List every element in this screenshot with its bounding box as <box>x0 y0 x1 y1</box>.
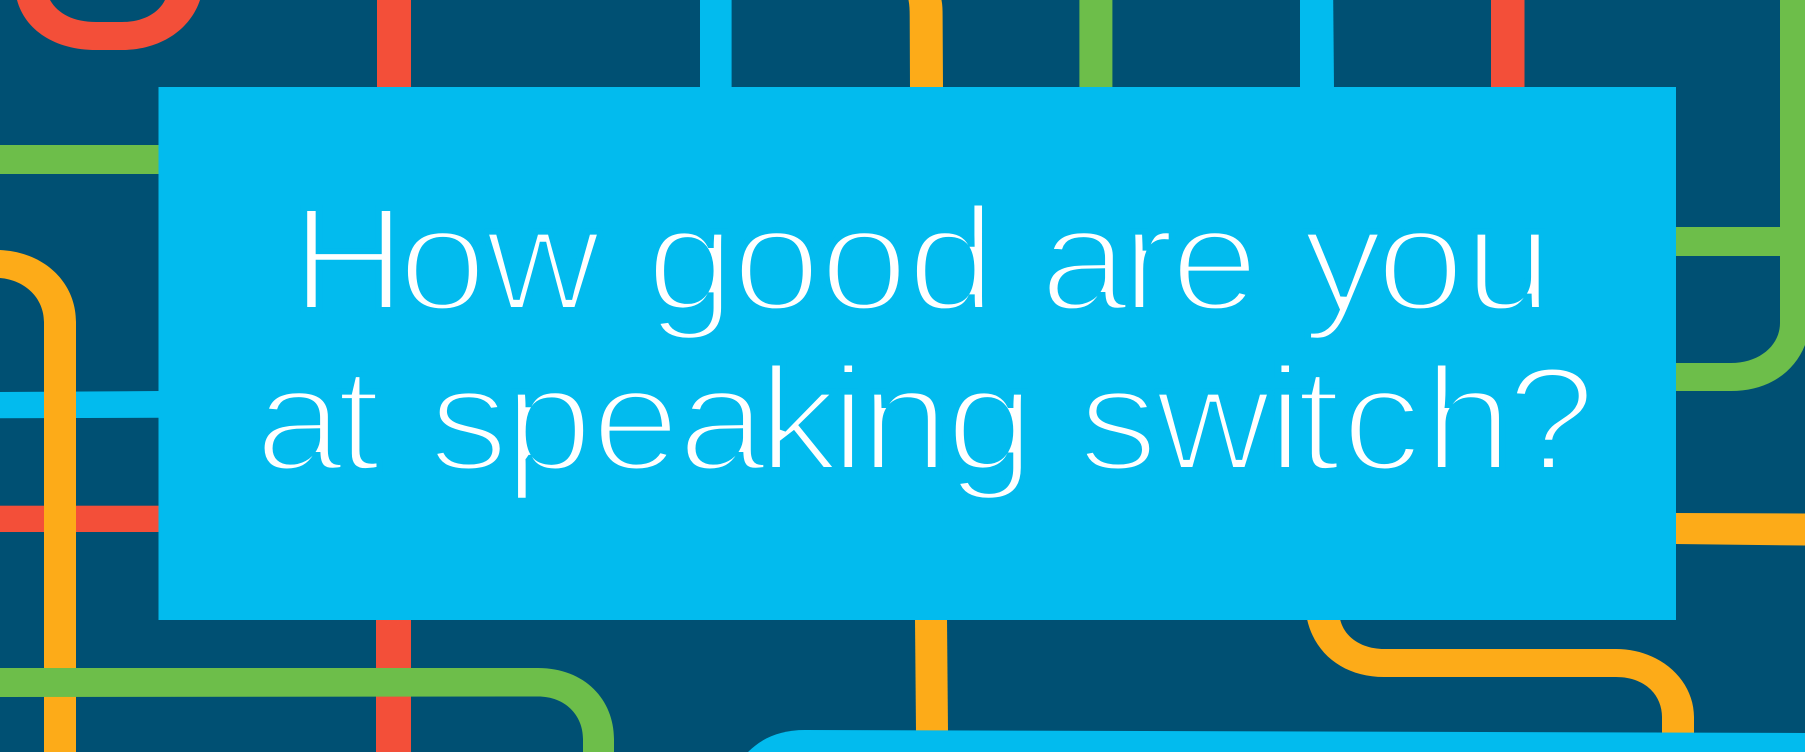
title line 1: How good are you <box>291 175 1553 342</box>
cyan line top <box>700 0 732 88</box>
green line right <box>1675 227 1781 256</box>
orange curved line left <box>0 250 76 752</box>
cyan line left <box>0 391 160 418</box>
orange S-curved line bottom right <box>1307 619 1694 734</box>
red line top right <box>1491 0 1524 88</box>
orange line right <box>1675 513 1805 546</box>
green line left <box>0 145 160 174</box>
red line bottom <box>376 619 411 752</box>
cyan line top right <box>1300 0 1334 88</box>
green curved line right <box>1675 0 1805 391</box>
orange line top <box>908 0 943 88</box>
title panel <box>158 87 1676 620</box>
title <box>255 175 1596 502</box>
bottom cyan panel edge <box>748 730 1805 752</box>
orange line bottom <box>915 619 948 732</box>
red line top <box>377 0 411 88</box>
green curved line bottom left <box>0 668 614 752</box>
green line top <box>1079 0 1112 88</box>
red curved line top left <box>17 0 200 50</box>
title line 2: at speaking switch? <box>255 335 1596 502</box>
red line left <box>0 506 160 532</box>
